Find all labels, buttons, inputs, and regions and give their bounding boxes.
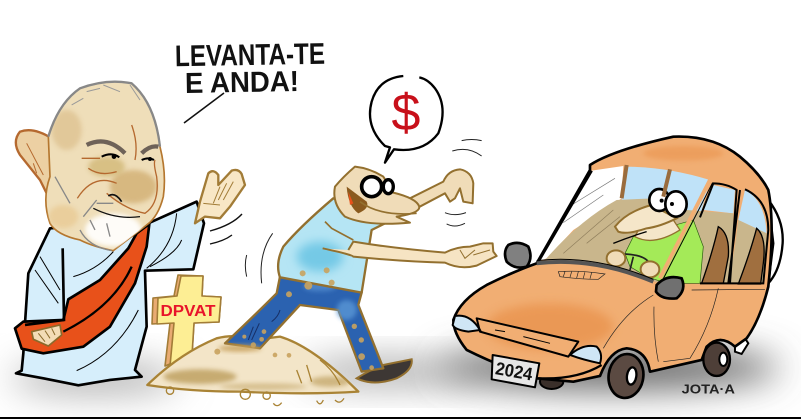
arms <box>323 242 497 267</box>
body <box>453 137 772 382</box>
dollar sign: $ <box>392 84 421 142</box>
dirt at foot <box>218 345 262 352</box>
front wheel under bumper <box>540 374 563 389</box>
headlights <box>453 316 480 332</box>
grave mound <box>147 336 358 393</box>
grille <box>477 318 578 357</box>
speech text: E ANDA! <box>185 66 299 100</box>
motion lines: robed man's hand <box>210 214 242 244</box>
front bumper edge <box>538 365 602 378</box>
face shading <box>48 110 157 247</box>
rear side sliver <box>768 200 783 283</box>
windshield top <box>538 166 623 262</box>
speech bubble <box>370 76 443 163</box>
pillars and window frames <box>538 171 592 262</box>
lower hand <box>32 325 62 346</box>
signature: JOTA·A <box>682 382 735 396</box>
windows sky <box>622 167 710 217</box>
sash <box>15 224 149 353</box>
seats <box>702 227 729 283</box>
car: 2024 <box>494 358 534 384</box>
sleeve edges and folds <box>35 213 182 371</box>
head <box>46 82 164 251</box>
robe <box>16 202 204 385</box>
shirt <box>278 198 392 293</box>
bottom border <box>0 417 801 419</box>
driver eyes <box>649 189 669 211</box>
rear bumper <box>735 338 748 354</box>
speech pointer line <box>184 93 224 123</box>
ground shadows <box>10 346 780 393</box>
motion lines <box>245 139 482 283</box>
shoe <box>357 359 412 382</box>
driver <box>625 220 703 283</box>
speech text: LEVANTA-TE <box>175 38 325 73</box>
hair <box>48 82 160 147</box>
raised hand <box>195 170 245 223</box>
front wheel <box>606 352 646 400</box>
interior <box>545 198 733 283</box>
figure: robed man <box>15 82 245 385</box>
windshield base <box>537 262 653 282</box>
speech text <box>175 38 325 100</box>
figure: man rising from grave <box>147 76 497 406</box>
head <box>334 167 419 224</box>
facial features <box>87 141 158 153</box>
cross: DPVAT <box>152 275 221 366</box>
steering wheel and hands <box>625 254 648 270</box>
licence plate <box>492 355 539 387</box>
dirt specks <box>214 267 374 370</box>
eyes and mouth <box>347 187 367 213</box>
rear wheel <box>703 343 730 376</box>
trousers <box>225 277 383 372</box>
mirrors <box>505 243 530 268</box>
cross: DPVAT: DPVAT <box>160 303 216 320</box>
hood vent and door lines <box>558 271 605 279</box>
dirt pebbles <box>166 360 344 406</box>
ear <box>16 130 58 200</box>
car <box>453 137 783 400</box>
